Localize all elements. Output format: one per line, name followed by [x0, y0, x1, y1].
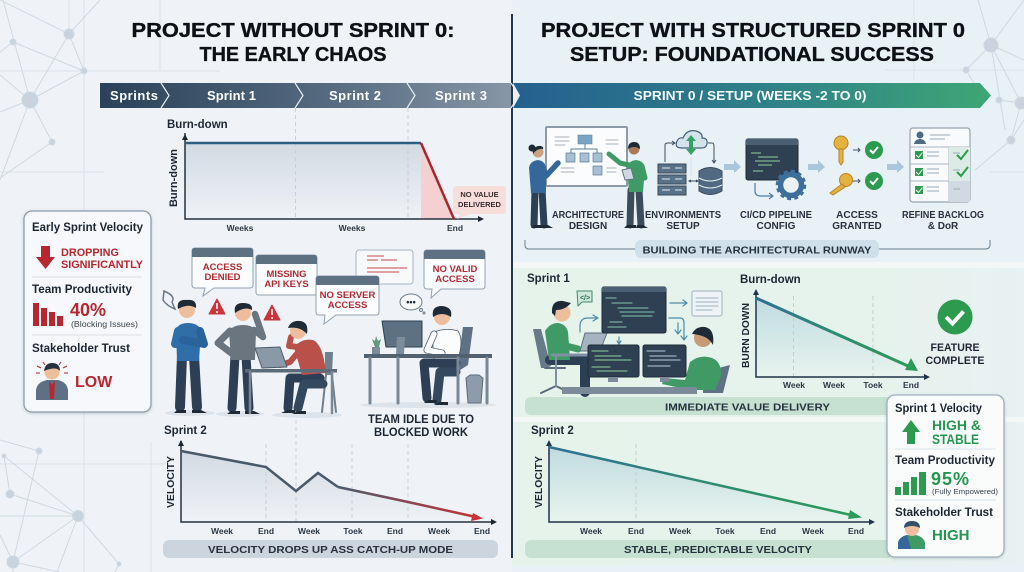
burn-down chart: steady [740, 274, 930, 390]
setup step: refine backlog: REFINE BACKLOG [902, 210, 984, 221]
caption pill: velocity drops: VELOCITY DROPS UP ASS CATCH-UP MODE [208, 545, 453, 556]
person: idle at desktop: ••• [406, 297, 416, 307]
runway bracket and pill [525, 240, 990, 258]
runway bracket and pill: BUILDING THE ARCHITECTURAL RUNWAY [642, 246, 872, 256]
velocity chart: sprint 2 left [164, 420, 497, 536]
high and stable text [932, 418, 981, 447]
setup step: environments: SETUP [666, 221, 700, 232]
bubble: no valid access: NO VALID [433, 264, 477, 275]
velocity chart: sprint 2 right: Sprint 2 [531, 425, 574, 437]
setup step: refine backlog [902, 128, 984, 232]
centre divider [511, 14, 513, 558]
panel: Sprint 2 green band [512, 422, 1024, 565]
setup step: access granted [830, 136, 883, 232]
feature complete badge [926, 300, 984, 367]
title: left [132, 20, 454, 66]
burn-down chart: steady: Toek [863, 380, 883, 390]
sprint timeline banner: Sprint 1 [207, 88, 256, 103]
sprint 1 heading: Sprint 1 [527, 273, 570, 285]
velocity chart: sprint 2 left: VELOCITY [166, 456, 177, 508]
feature complete badge: FEATURE [930, 342, 980, 354]
velocity chart: sprint 2 left: Week [428, 526, 450, 536]
velocity chart: sprint 2 right: End [848, 526, 864, 536]
bubble: no server access: NO SERVER [320, 290, 376, 301]
setup step: ci/cd pipeline: CI/CD PIPELINE [740, 210, 812, 221]
burn-down chart: steady: Week [783, 380, 805, 390]
setup step: refine backlog: & DoR [928, 221, 959, 232]
title: left: PROJECT WITHOUT SPRINT 0: [132, 20, 454, 42]
dropping significantly text: DROPPING [61, 247, 119, 259]
velocity chart: sprint 2 left: Week [298, 526, 320, 536]
panel: sprint 1 metrics: Team Productivity [895, 455, 996, 467]
high and stable text: STABLE [932, 432, 979, 447]
high and stable text: HIGH & [932, 418, 981, 433]
setup step: access granted: GRANTED [832, 221, 882, 232]
panel: early sprint metrics: 40% [70, 300, 106, 320]
panel: early sprint metrics: (Blocking Issues) [71, 320, 138, 329]
velocity chart: sprint 2 left: End [387, 526, 403, 536]
velocity chart: sprint 2 left: Sprint 2 [164, 425, 207, 437]
burn-down chart: flat then crash: Weeks [339, 223, 366, 233]
background: left half [0, 0, 512, 572]
panel: early sprint metrics [24, 211, 151, 412]
sprint timeline banner: Sprint 2 [329, 88, 381, 103]
velocity chart: sprint 2 left: Toek [343, 526, 363, 536]
velocity chart: sprint 2 left: Week [211, 526, 233, 536]
burn-down chart: flat then crash: Burn-down [168, 149, 180, 207]
arrow [808, 160, 825, 173]
title: right [541, 20, 965, 66]
panel: early sprint metrics: Early Sprint Velocity [32, 222, 144, 234]
icon: declining bars [33, 303, 63, 326]
setup step: architecture design: ARCHITECTURE [552, 210, 624, 221]
arrow [887, 160, 904, 173]
velocity chart: sprint 2 left: End [258, 526, 274, 536]
bubble: missing api keys: MISSING [266, 269, 307, 280]
panel: sprint 1 metrics: HIGH [932, 527, 970, 544]
panel: sprint 1 metrics: 95% [931, 469, 969, 489]
sprint timeline banner: Sprint 3 [435, 88, 487, 103]
burn-down chart: steady: End [903, 380, 919, 390]
caption pill: stable velocity: STABLE, PREDICTABLE VELOCITY [624, 545, 812, 556]
feature complete badge: COMPLETE [926, 355, 984, 367]
velocity chart: sprint 2 right: VELOCITY [534, 456, 545, 508]
setup step: ci/cd pipeline [740, 139, 812, 232]
title: right: SETUP: FOUNDATIONAL SUCCESS [570, 44, 934, 66]
caption: team idle: TEAM IDLE DUE TO [368, 414, 474, 426]
caption pill: velocity drops [163, 540, 498, 558]
illustration: developers delivering [533, 287, 730, 394]
setup step: environments: ENVIRONMENTS [645, 210, 721, 221]
sprint timeline banner: Sprints [110, 88, 158, 103]
burn-down chart: steady: BURN DOWN [741, 303, 752, 368]
setup step: ci/cd pipeline: CONFIG [757, 221, 796, 232]
panel: early sprint metrics: LOW [75, 374, 113, 391]
bubble: no valid access: ACCESS [435, 274, 475, 285]
velocity chart: sprint 2 right: Week [669, 526, 691, 536]
sprint timeline banner [100, 83, 519, 108]
burn-down chart: flat then crash [167, 108, 506, 233]
velocity chart: sprint 2 right: End [628, 526, 644, 536]
person: grey hand on head [216, 303, 264, 417]
caption: team idle [368, 414, 474, 439]
burn-down chart: flat then crash: Weeks [227, 223, 254, 233]
person: blue arms crossed [165, 300, 215, 416]
bubble: missing api keys: API KEYS [264, 279, 309, 290]
panel: sprint 1 metrics: (Fully Empowered) [932, 489, 998, 496]
panel: sprint 1 metrics: Sprint 1 Velocity [895, 403, 983, 415]
burn-down chart: steady: Week [823, 380, 845, 390]
background: right half [512, 0, 1024, 572]
dropping significantly text: SIGNIFICANTLY [61, 259, 144, 271]
caption pill: stable velocity [525, 540, 893, 558]
title: right: PROJECT WITH STRUCTURED SPRINT 0 [541, 20, 965, 42]
burn-down chart: flat then crash: Burn-down [167, 119, 228, 131]
icon: green up arrow [902, 420, 920, 444]
bubble: no valid access [424, 250, 485, 298]
setup step: access granted: ACCESS [836, 210, 878, 221]
icon: warning triangle [209, 299, 225, 314]
panel: early sprint metrics: Stakeholder Trust [32, 343, 130, 355]
dropping significantly text [61, 247, 144, 271]
arrow [724, 160, 741, 173]
callout: no value delivered [453, 186, 506, 219]
icon: confusion scribble [163, 291, 175, 309]
setup step: architecture design: DESIGN [569, 221, 607, 232]
velocity chart: sprint 2 right: Toek [715, 526, 735, 536]
velocity chart: sprint 2 right [531, 425, 875, 536]
caption: team idle: BLOCKED WORK [374, 427, 469, 439]
icon: warning triangle [264, 305, 280, 320]
setup step: environments [645, 131, 722, 232]
setup banner arrow: SPRINT 0 / SETUP (WEEKS -2 TO 0) [634, 89, 866, 103]
callout: no value delivered: DELIVERED [458, 200, 502, 209]
title: left: THE EARLY CHAOS [200, 44, 386, 66]
setup banner arrow [513, 83, 991, 108]
caption pill: immediate value [525, 397, 893, 415]
bubble: access denied: ACCESS [203, 262, 242, 273]
velocity chart: sprint 2 right: Week [802, 526, 824, 536]
person: idle at desktop [360, 294, 496, 408]
icon: red down arrow [36, 246, 55, 269]
bubble: missing api keys [256, 255, 317, 295]
person: red at laptop with desk [245, 321, 342, 418]
burn-down chart: flat then crash: End [447, 223, 463, 233]
bubble: no server access: ACCESS [328, 300, 367, 311]
velocity chart: sprint 2 right: Week [580, 526, 602, 536]
illustration: developers delivering: </> [580, 295, 590, 302]
bubble: access denied [192, 248, 253, 296]
icon: rising bars [895, 472, 926, 495]
setup step: architecture design [528, 127, 648, 232]
caption pill: immediate value: IMMEDIATE VALUE DELIVERY [665, 402, 830, 414]
velocity chart: sprint 2 right: End [760, 526, 776, 536]
velocity chart: sprint 2 left: End [474, 526, 490, 536]
log document window [356, 250, 413, 284]
burn-down chart: steady: Burn-down [740, 274, 801, 286]
panel: sprint 1 metrics [887, 395, 1004, 557]
callout: no value delivered: NO VALUE [460, 190, 499, 199]
icon: happy stakeholder [898, 521, 925, 549]
bubble: access denied: DENIED [205, 272, 241, 283]
panel: Sprint 1 green band [512, 262, 1024, 422]
panel: sprint 1 metrics: Stakeholder Trust [895, 507, 993, 519]
icon: unhappy stakeholder [36, 362, 68, 400]
bubble: no server access [316, 276, 379, 324]
panel: early sprint metrics: Team Productivity [32, 284, 133, 296]
